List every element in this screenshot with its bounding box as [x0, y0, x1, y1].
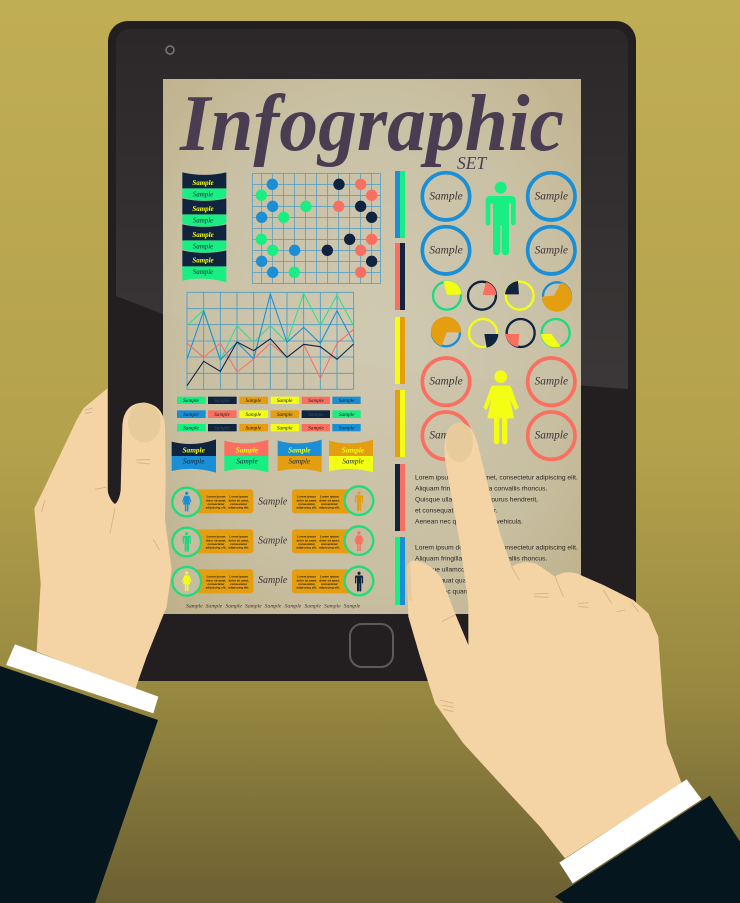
ribbon pair salmon and green: [224, 440, 268, 472]
people row 1: dolor sit amet,: [228, 498, 249, 502]
label rows: Sample: [339, 412, 355, 418]
bottom sample row: Sample: [206, 604, 223, 610]
bottom sample row: Sample: [225, 604, 242, 610]
people row 2: Lorem ipsum: [320, 535, 339, 539]
label rows: Sample: [308, 398, 324, 404]
people row 1: adipiscing elit.: [319, 506, 340, 510]
people row 2: Sample: [258, 536, 288, 547]
thumb nail: [128, 403, 161, 443]
people row 2: adipiscing elit.: [206, 546, 227, 550]
paragraph 2: Quisque ullamcorper nec purus hendrerit,: [415, 566, 538, 574]
ribbon banner stack: Sample: [192, 257, 214, 265]
dark sleeve: [0, 666, 158, 903]
salmon rings: [422, 358, 575, 459]
people row 3: dolor sit amet,: [206, 578, 226, 582]
people row 2: Lorem ipsum: [297, 535, 316, 539]
people row 3: adipiscing elit.: [296, 586, 317, 590]
label rows: Sample: [245, 425, 262, 431]
bottom sample row: [186, 604, 361, 610]
ribbon pair blue and orange: Sample: [289, 457, 311, 466]
people row 3: dolor sit amet,: [296, 578, 317, 582]
ribbon pair blue and orange: Sample: [288, 446, 311, 455]
pie charts row 1: [433, 281, 572, 312]
ribbon pair orange and yellow: Sample: [342, 446, 365, 455]
people row 3: dolor sit amet,: [228, 578, 249, 582]
bottom sample row: Sample: [324, 604, 341, 610]
people row 1: adipiscing elit.: [228, 506, 249, 510]
label rows: Sample: [214, 398, 230, 404]
label rows: Sample: [339, 425, 355, 431]
label rows: Sample: [183, 425, 199, 431]
blue ring labels: [429, 190, 568, 256]
blue ring labels: Sample: [535, 244, 568, 256]
people row 2: [172, 526, 373, 556]
ribbon pair navy and blue: Sample: [183, 457, 205, 466]
people row 1: dolor sit amet,: [319, 498, 340, 502]
people row 2: Lorem ipsum: [207, 535, 226, 539]
knuckle creases: [440, 567, 638, 712]
people row 3: Lorem ipsum: [229, 575, 248, 579]
people row 2: adipiscing elit.: [319, 546, 340, 550]
paragraph 1: Aliquam fringilla quis nulla convallis rhoncus.: [415, 486, 547, 492]
people row 3: Lorem ipsum: [297, 575, 316, 579]
people row 1: consectetur: [321, 502, 339, 506]
blue ring labels: Sample: [535, 190, 568, 202]
people row 3: Lorem ipsum: [320, 575, 339, 579]
ribbon banner stack: Sample: [193, 190, 213, 198]
ribbon banner stack: Sample: [193, 216, 213, 224]
paragraph 2: et consequat quam semper.: [415, 578, 498, 584]
label rows: Sample: [183, 412, 199, 418]
people row 2: adipiscing elit.: [228, 546, 249, 550]
people row 3: consectetur: [230, 582, 248, 586]
ribbon pair orange and yellow: Sample: [342, 457, 365, 466]
hand shape: [407, 423, 682, 858]
ribbon pair orange and yellow: [329, 440, 373, 472]
people row 1: [172, 486, 373, 516]
paragraph 1: Quisque ullamcorper nec purus hendrerit,: [415, 496, 538, 504]
bottom sample row: Sample: [304, 604, 321, 610]
paragraph 1: et consequat quam semper.: [415, 508, 498, 514]
pie charts row 2: [431, 317, 570, 348]
label rows: Sample: [339, 398, 355, 404]
label rows: Sample: [308, 412, 324, 418]
people row 3: adipiscing elit.: [228, 586, 249, 590]
ribbon pair navy and blue: [172, 439, 216, 473]
people row 3: consectetur: [298, 582, 316, 586]
paragraph 1: [415, 474, 578, 526]
blue ring labels: Sample: [429, 244, 463, 256]
people row 2: consectetur: [321, 542, 339, 546]
people row 1: Lorem ipsum: [297, 495, 316, 499]
people row 2: dolor sit amet,: [228, 538, 249, 542]
people row 3: Lorem ipsum: [207, 575, 226, 579]
ribbon banner stack: [182, 172, 226, 282]
people row 3: consectetur: [208, 582, 225, 586]
salmon ring labels: Sample: [535, 376, 568, 388]
people row 2: consectetur: [298, 542, 316, 546]
dot grid chart: [252, 173, 381, 284]
left column charts: [182, 172, 381, 389]
people row 1: adipiscing elit.: [206, 506, 227, 510]
thumb shade: [407, 562, 412, 602]
people row 3: Sample: [258, 575, 288, 586]
title: Infographic: [179, 80, 564, 168]
people row 2: consectetur: [208, 542, 225, 546]
knuckle creases: [42, 408, 159, 550]
ribbon banner stack: Sample: [193, 242, 213, 250]
people row 1: Lorem ipsum: [229, 495, 248, 499]
bottom sample row: Sample: [285, 604, 302, 610]
right hand: [407, 422, 740, 903]
dark sleeve: [555, 796, 740, 903]
label rows: Sample: [214, 425, 230, 431]
left column lower components: [172, 397, 373, 610]
home button: [350, 624, 393, 667]
gloss reflection: [116, 29, 628, 389]
ribbon banner stack: Sample: [192, 179, 214, 187]
people row 1: dolor sit amet,: [206, 498, 226, 502]
paragraph 2: [415, 544, 578, 596]
ribbon pair salmon and green: Sample: [236, 457, 259, 466]
people row 1: Lorem ipsum: [207, 495, 226, 499]
white cuff: [6, 644, 158, 713]
label rows: [177, 397, 361, 431]
ribbon banner stack: Sample: [193, 268, 213, 276]
icon: green man: [486, 182, 516, 255]
white cuff: [559, 779, 702, 883]
ribbon pair blue and orange: [278, 440, 322, 472]
left hand: [0, 388, 172, 903]
people row 2: adipiscing elit.: [296, 546, 317, 550]
ribbon pair salmon and green: Sample: [236, 446, 259, 455]
people row 1: Sample: [258, 496, 288, 507]
people row 1: dolor sit amet,: [296, 498, 317, 502]
bottom sample row: Sample: [265, 604, 282, 610]
ribbon pair navy and blue: Sample: [182, 446, 206, 455]
people row 2: Lorem ipsum: [229, 535, 248, 539]
paragraph 1: Aenean nec quam pulvinar vehicula.: [415, 518, 523, 526]
people row 2: dolor sit amet,: [206, 538, 226, 542]
bottom sample row: Sample: [245, 604, 262, 610]
blue ring labels: Sample: [429, 190, 463, 202]
people row 3: consectetur: [321, 582, 339, 586]
salmon ring labels: [429, 376, 568, 442]
salmon ring labels: Sample: [429, 430, 463, 442]
paragraph 2: Aliquam fringilla quis nulla convallis rhoncus.: [415, 556, 547, 562]
label rows: Sample: [245, 412, 262, 418]
bottom sample row: Sample: [186, 604, 203, 610]
paragraph 2: Aenean nec quam pulvinar vehicula.: [415, 588, 523, 596]
people row 3: adipiscing elit.: [319, 586, 340, 590]
label rows: Sample: [277, 425, 293, 431]
label rows: Sample: [308, 425, 324, 431]
people row 2: consectetur: [230, 542, 248, 546]
paragraph 2: Lorem ipsum dolor sit amet, consectetur adipiscing elit.: [415, 544, 578, 552]
camera: [166, 46, 174, 54]
people row 3: [172, 567, 373, 596]
ribbon banner stack: Sample: [192, 205, 214, 213]
label rows: Sample: [245, 398, 262, 404]
screen gloss: [163, 79, 581, 385]
line chart: [187, 292, 354, 389]
tablet: [108, 21, 636, 681]
color strip dividers: [395, 171, 405, 605]
people row 1: consectetur: [230, 502, 248, 506]
people row 3: dolor sit amet,: [319, 578, 340, 582]
salmon ring labels: Sample: [535, 430, 568, 442]
icon: yellow woman: [483, 370, 519, 444]
screen: [163, 79, 581, 614]
salmon ring labels: Sample: [429, 376, 463, 388]
people row 1: consectetur: [298, 502, 316, 506]
hand shape: [34, 388, 172, 690]
label rows: Sample: [277, 398, 293, 404]
people row 1: Lorem ipsum: [320, 495, 339, 499]
index finger nail: [446, 422, 473, 462]
label rows: Sample: [277, 412, 293, 418]
bottom sample row: Sample: [344, 604, 361, 610]
people row 3: adipiscing elit.: [206, 586, 227, 590]
people row 2: dolor sit amet,: [296, 538, 317, 542]
subtitle: SET: [457, 153, 487, 173]
label rows: Sample: [183, 398, 199, 404]
people row 1: consectetur: [208, 502, 225, 506]
people row 2: dolor sit amet,: [319, 538, 340, 542]
people row 1: adipiscing elit.: [296, 506, 317, 510]
ribbon banner stack: Sample: [192, 231, 214, 239]
blue rings: [422, 173, 575, 274]
paragraph 1: Lorem ipsum dolor sit amet, consectetur adipiscing elit.: [415, 474, 578, 482]
label rows: Sample: [214, 412, 230, 418]
right column graphics: [422, 173, 575, 459]
